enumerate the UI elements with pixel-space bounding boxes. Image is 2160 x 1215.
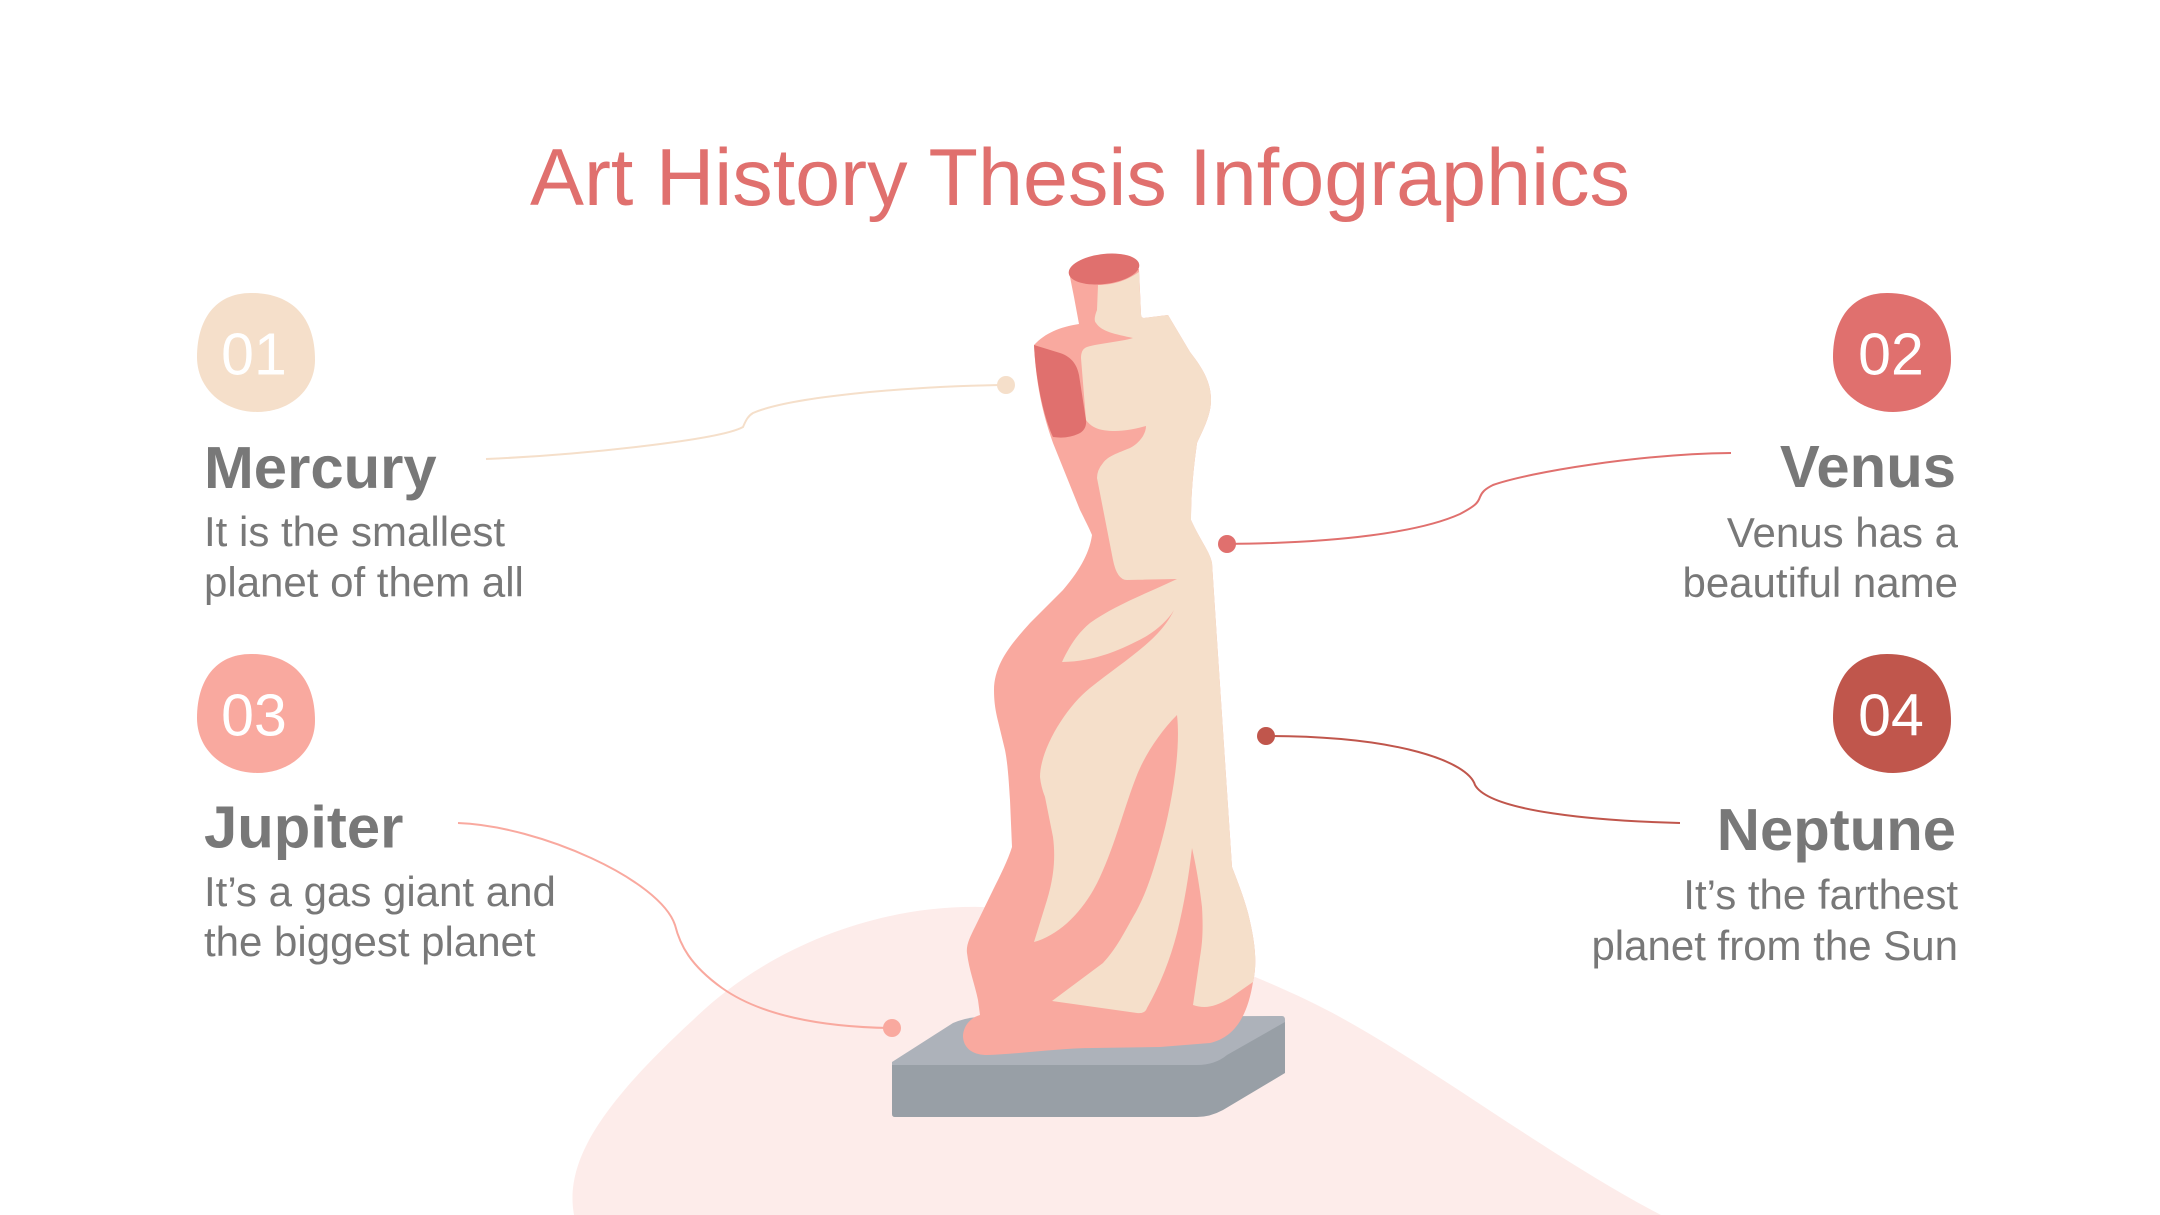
text Mercury: It is the smallest (204, 508, 505, 555)
title: Art History Thesis Infographics (530, 133, 1630, 223)
badge 01: 01 (221, 322, 287, 388)
text Neptune: It’s the farthest (1683, 871, 1958, 918)
statue shoulder shade (1034, 345, 1086, 438)
text Venus: Venus has a (1727, 509, 1958, 556)
text Neptune: planet from the Sun (1591, 922, 1958, 969)
badge 03 (197, 654, 315, 773)
badge 03: 03 (221, 682, 287, 748)
statue body (963, 269, 1255, 1055)
item 04 Neptune (1591, 654, 1958, 969)
background blob (572, 907, 1661, 1215)
connector: Jupiter (458, 823, 901, 1037)
connector: Mercury (486, 376, 1015, 459)
heading Venus: Venus (1780, 433, 1956, 500)
heading Neptune: Neptune (1717, 796, 1956, 863)
pedestal top (892, 1016, 1285, 1066)
neck top (1067, 250, 1141, 288)
statue (892, 250, 1285, 1117)
item 01 Mercury (197, 293, 524, 606)
badge 02 (1833, 293, 1951, 412)
badge 04 (1833, 654, 1951, 773)
item 03 Jupiter (197, 654, 556, 965)
text Jupiter: It’s a gas giant and (204, 868, 556, 915)
heading Jupiter: Jupiter (204, 794, 403, 860)
connector: Neptune (1257, 727, 1680, 823)
text Venus: beautiful name (1682, 559, 1958, 606)
text Jupiter: the biggest planet (204, 918, 536, 965)
connector: Venus (1218, 453, 1731, 553)
badge 02: 02 (1858, 322, 1924, 388)
badge 04: 04 (1858, 682, 1924, 748)
statue cream drapery (1034, 272, 1255, 1013)
badge 01 (197, 293, 315, 412)
heading Mercury: Mercury (204, 434, 437, 501)
text Mercury: planet of them all (204, 558, 524, 606)
item 02 Venus (1682, 293, 1959, 606)
pedestal front (892, 1022, 1285, 1117)
